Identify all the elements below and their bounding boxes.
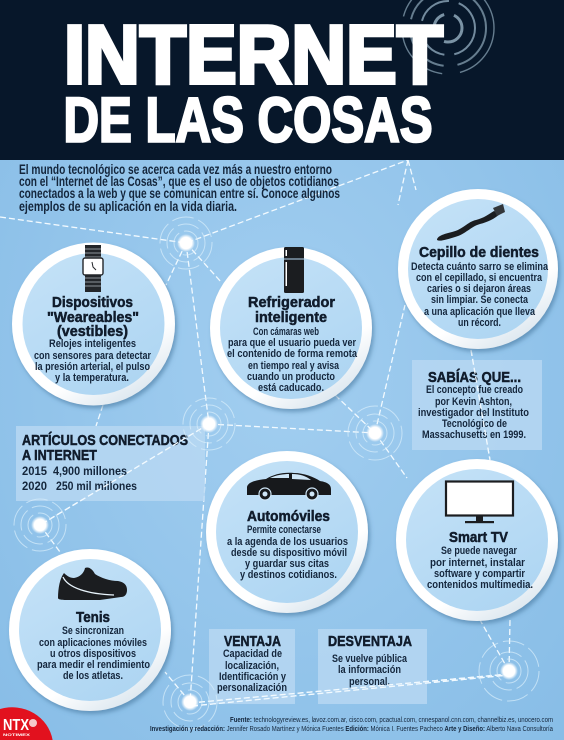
text: refrigerador: Con cámaras web [253, 326, 319, 338]
icon: toothbrush [437, 204, 505, 241]
icon: shoe [58, 567, 127, 600]
text: refrigerador: para que el usuario pueda ver [228, 337, 356, 349]
heading: wearables: "Weareables" [47, 310, 139, 326]
heading: automóviles: Automóviles [247, 509, 330, 525]
footer credits: Investigación y redacción: Jennifer Rosado Martínez y Mónica Fuentes Edición: Mónica I. Fuentes Pacheco Arte y Diseño: Alberto Nava Consultoría [150, 726, 553, 733]
info box: desventaja: DESVENTAJA [328, 634, 412, 650]
panel: cepillo de dientes [398, 189, 558, 349]
text: tenis: para medir el rendimiento [37, 659, 150, 671]
text: smart tv: Se puede navegar [441, 545, 517, 557]
text: cepillo: con el cepillado, si encuentra [416, 272, 542, 284]
text: cepillo: sin limpiar. Se conecta [431, 294, 528, 306]
text: tenis: u otros dispositivos [50, 648, 136, 660]
title [64, 8, 443, 156]
text: tenis: con aplicaciones móviles [39, 637, 147, 649]
text: automóviles: desde su dispositivo móvil [231, 547, 347, 559]
text: cepillo: un récord. [458, 317, 501, 329]
text: wearables: la presión arterial, el pulso [35, 361, 150, 373]
intro text: ejemplos de su aplicación en la vida diaria. [19, 199, 237, 214]
header signal rings [402, 0, 494, 74]
title: INTERNET [64, 8, 443, 101]
text: smart tv: software y compartir [434, 568, 525, 580]
text: smart tv [427, 545, 533, 591]
heading: refrigerador: Refrigerador [248, 295, 335, 311]
text: automóviles: y guardar sus citas [245, 558, 329, 570]
text: refrigerador: está caducado. [258, 382, 324, 394]
text: automóviles: a la agenda de los usuarios [227, 536, 348, 548]
heading: wearables [47, 295, 139, 340]
text: smart tv: contenidos multimedia. [427, 579, 533, 591]
text: wearables [34, 338, 151, 384]
intro text: El mundo tecnológico se acerca cada vez más a nuestro entorno [19, 162, 332, 177]
text: tenis [37, 625, 150, 682]
intro text: conectados a la web y que se comunican entre sí. Conoce algunos [19, 186, 340, 201]
text: tenis: de los atletas. [63, 670, 123, 682]
info box: ventaja: VENTAJA [224, 634, 281, 650]
info box: sabías que: investigador del Instituto [418, 407, 529, 419]
info box: artículos conectados: 4,900 millones [53, 464, 127, 478]
heading: refrigerador: inteligente [255, 310, 327, 326]
text: smart tv: por internet, instalar [430, 557, 525, 569]
info box: desventaja: la información [338, 664, 401, 676]
heading: refrigerador [248, 295, 335, 326]
info box: desventaja [318, 629, 427, 704]
text: wearables: con sensores para detectar [34, 350, 151, 362]
footer credits [150, 717, 553, 733]
text: cepillo [411, 261, 548, 329]
text: tenis: Se sincronizan [62, 625, 124, 637]
network nodes [14, 217, 539, 729]
info box: artículos conectados: ARTÍCULOS CONECTADOS [22, 432, 188, 449]
icon: car [247, 473, 331, 500]
text: wearables: Relojes inteligentes [49, 338, 136, 350]
info box: artículos conectados: 250 mil millones [56, 479, 137, 493]
title: DE LAS COSAS [64, 86, 432, 156]
logo: NTX Notimex [0, 707, 53, 740]
network connection lines [0, 160, 510, 706]
text: cepillo: a una aplicación que lleva [424, 306, 535, 318]
intro text [19, 162, 340, 214]
info box: sabías que: por Kevin Ashton, [435, 396, 512, 408]
text: cepillo: caries o si dejaron áreas [427, 283, 531, 295]
info box: sabías que: Massachusetts en 1999. [422, 429, 526, 441]
panel: smart tv [396, 459, 558, 621]
panel: tenis [9, 549, 171, 711]
info box: desventaja: Se vuelve pública [332, 653, 407, 665]
text: refrigerador: en tiempo real y avisa [248, 360, 339, 372]
heading: wearables: (vestibles) [57, 324, 128, 340]
logo: NTX Notimex: NTX [3, 717, 29, 734]
info box: ventaja: localización, [225, 660, 279, 672]
intro text: con el “Internet de las Cosas”, que es el uso de objetos cotidianos [19, 174, 339, 189]
info box: sabías que: SABÍAS QUE... [428, 369, 521, 386]
panel: wearables [12, 242, 175, 406]
icon: fridge [284, 247, 304, 293]
icon: tv [446, 482, 513, 523]
icon: watch [83, 245, 103, 292]
info box: sabías que [412, 360, 542, 450]
info box: ventaja: Identificación y [219, 671, 286, 683]
info box: artículos conectados: 2020 [22, 479, 47, 493]
info box: desventaja: personal. [349, 676, 390, 688]
heading: smart tv: Smart TV [449, 530, 508, 546]
logo: NTX Notimex: NOTIMEX [3, 732, 30, 737]
heading: tenis: Tenis [76, 610, 110, 626]
heading: cepillo: Cepillo de dientes [419, 245, 539, 261]
info box: artículos conectados: 2015 [22, 464, 47, 478]
info box: ventaja [209, 629, 295, 704]
text: automóviles: y destinos cotidianos. [240, 569, 337, 581]
panel: automóviles [206, 451, 368, 613]
info box: sabías que: El concepto fue creado [426, 384, 523, 396]
heading: wearables: Dispositivos [52, 295, 133, 311]
info box: artículos conectados: A INTERNET [22, 448, 97, 464]
line over info boxes [40, 350, 509, 706]
panel: refrigerador [210, 247, 372, 409]
text: refrigerador: cuando un producto [247, 371, 335, 383]
info box: artículos conectados [16, 426, 205, 501]
info box: sabías que: Tecnológico de [442, 418, 507, 430]
text: automóviles: Permite conectarse [247, 524, 321, 536]
header band [0, 0, 564, 160]
text: refrigerador: el contenido de forma remota [227, 348, 357, 360]
info box: ventaja: personalización [217, 682, 287, 694]
text: automóviles [227, 524, 348, 581]
text: wearables: y la temperatura. [55, 372, 129, 384]
text: refrigerador [227, 326, 357, 394]
info box: ventaja: Capacidad de [223, 648, 282, 660]
